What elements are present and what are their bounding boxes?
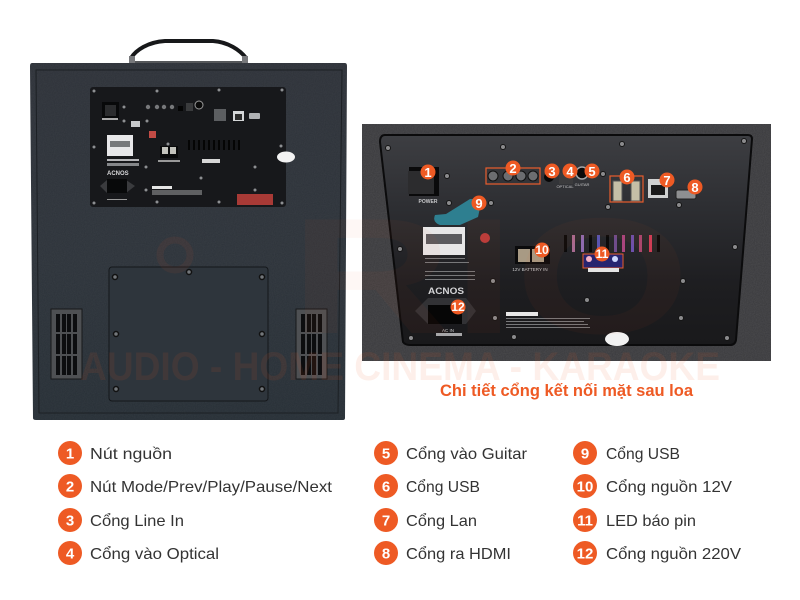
labels and barcode sticker [423,227,490,280]
callout badges: 8 [691,180,699,195]
callout badges: 11 [596,247,609,261]
legend column 2: 7 [382,512,390,530]
safety notice [506,312,590,328]
hdmi port [676,190,696,199]
led battery indicator [583,254,623,272]
legend column 1: 4 [66,546,75,562]
rear control plate: ACNOS [107,171,129,177]
callout badges: 1 [424,165,432,180]
callout badges: 9 [475,196,483,211]
callout badges: 6 [623,170,631,185]
usb ports [613,181,640,201]
right vent [296,309,327,379]
watermark: RIO [290,184,690,368]
lan port [648,179,668,198]
rear control plate [90,87,295,207]
legend column 2: 5 [382,446,390,462]
legend column 1 [58,441,333,565]
icon: carrying handle [129,41,248,63]
sticker [605,332,629,346]
left vent [51,309,82,379]
panel: connector detail photo [362,124,771,361]
legend column 2: Cổng USB [406,478,480,496]
legend column 3: 12 [577,546,593,562]
legend column 1: 3 [66,512,74,530]
callout badges: 4 [566,164,574,179]
legend column 3: Cổng USB [606,445,680,463]
legend column 2: 8 [382,546,390,562]
ventilation slots [564,235,660,252]
legend column 3: Cổng nguồn 12V [606,478,732,496]
line in, optical and guitar jacks: OPTICAL [556,184,574,189]
usb stick [434,199,482,225]
legend column 3: LED báo pin [606,513,696,530]
photo background [362,124,771,361]
line in, optical and guitar jacks [544,167,590,189]
callout badges [420,160,702,314]
callout badges: 12 [451,300,465,314]
callout badges: 7 [663,173,671,188]
legend column 2: 6 [382,478,390,496]
acnos logo: ACNOS [428,286,464,296]
panel: speaker rear view [30,41,347,420]
legend column 1: Cổng Line In [90,512,184,530]
line in, optical and guitar jacks: GUITAR [575,182,590,187]
legend column 2: Cổng ra HDMI [406,545,511,563]
power switch [408,167,439,205]
lower access panel [109,267,268,401]
legend column 3: Cổng nguồn 220V [606,545,741,563]
legend column 1: Nút nguồn [90,446,172,463]
speaker cabinet [30,63,347,420]
callout badges: 10 [535,243,549,257]
callout badges: 2 [509,161,517,176]
callout badges: 3 [548,164,556,179]
heading: detail caption: Chi tiết cổng kết nối mặt sau loa [440,381,694,400]
legend column 1: 1 [66,446,74,462]
ac power socket [415,298,476,336]
legend column 3: 11 [577,512,593,530]
legend column 3: 9 [581,446,589,462]
legend column 3: 10 [577,478,593,496]
watermark: AUDIO - HOME CINEMA - KARAOKE [80,345,720,389]
connector plate [380,135,752,345]
legend column 2: Cổng Lan [406,512,477,530]
highlight boxes [486,168,643,202]
battery terminal: 12V BATTERY IN [512,267,548,272]
callout badges: 5 [588,164,596,179]
control knobs [488,171,538,181]
legend column 1: 2 [66,478,74,496]
legend column 2: Cổng vào Guitar [406,445,528,463]
legend column 3 [573,441,741,565]
legend column 1: Nút Mode/Prev/Play/Pause/Next [90,479,333,496]
legend column 1: Cổng vào Optical [90,545,219,563]
legend [58,441,741,565]
legend column 2 [374,441,528,565]
power switch: POWER [419,199,438,205]
ac power socket: AC IN [442,328,454,333]
battery terminal [512,246,550,272]
watermark [80,184,720,389]
